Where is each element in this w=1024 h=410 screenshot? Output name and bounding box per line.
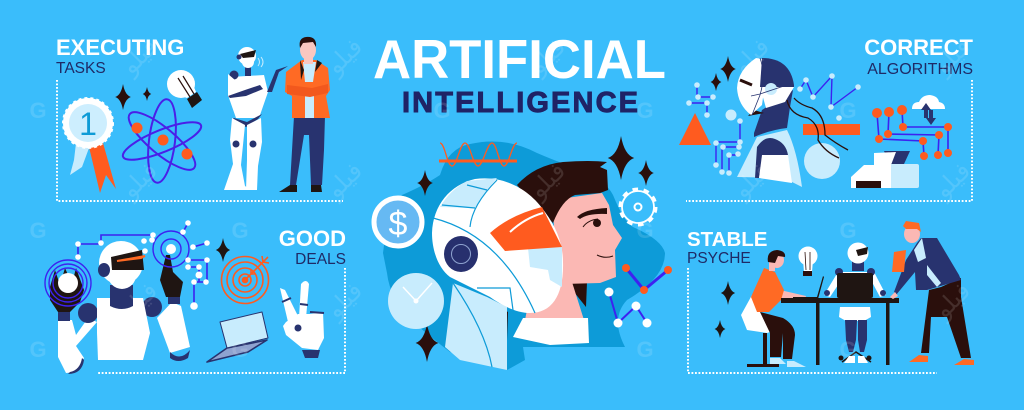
watermarks: فیلو [929,33,976,81]
background blob [383,141,665,370]
watermarks: فیلو [929,277,976,325]
watermarks: G [29,218,47,243]
robot bust [737,58,848,187]
robot at desk [824,242,886,363]
watermarks: فیلو [524,157,571,205]
icon: wave [439,143,517,166]
watermarks: G [29,337,47,362]
heading: correct algorithms: CORRECT [864,35,974,60]
icon: gear [620,189,656,225]
heading: correct algorithms: ALGORITHMS [867,61,973,78]
watermarks: فیلو [728,33,775,81]
panel: center portrait [374,136,672,370]
icon: circles [726,110,840,179]
icon: sparkle [216,238,230,262]
watermarks: G [839,218,857,243]
standing man [890,221,974,365]
icon: light bulb [798,246,818,276]
icon: sparkles [416,136,654,362]
seated man [741,250,806,367]
heading: executing tasks: EXECUTING [56,35,184,60]
icon: dollar coin [374,198,422,246]
watermarks: فیلو [321,157,368,205]
watermarks: G [29,98,47,123]
heading: good deals: GOOD [279,226,346,251]
icon: target [222,256,269,304]
icon: medal: 1 [79,106,97,142]
watermarks: G [636,218,654,243]
icon: sparkles [711,56,736,91]
watermarks: G [839,98,857,123]
watermarks: G [636,337,654,362]
icon: clock [388,273,444,329]
desk and laptop [781,276,899,365]
panel: stable psyche [687,221,974,367]
heading: good deals [279,226,346,268]
icon: medal [63,98,116,193]
icon: printer [851,151,919,188]
robot with rings [50,241,190,374]
watermarks: فیلو [116,157,163,205]
icon: light nodes network [686,73,861,176]
heading: executing tasks [56,35,184,77]
watermarks: فیلو [321,277,368,325]
watermarks: G [636,98,654,123]
icon: graph white [604,288,652,328]
panel: correct algorithms [679,35,974,188]
robot helmet [432,178,563,370]
panel: good deals [45,220,346,374]
watermarks: G [433,98,451,123]
watermarks: G [839,337,857,362]
icon: sparkles [715,281,735,338]
icon: sparkles [115,84,151,110]
icon: light bulb [167,70,202,108]
icon: triangle [679,113,711,145]
heading: executing tasks: TASKS [56,60,106,77]
icon: graph orange [622,264,672,294]
title: ARTIFICIAL [373,28,666,90]
man standing [279,37,330,192]
watermarks: فیلو [321,33,368,81]
face and hair [517,161,622,284]
watermarks: فیلو [929,157,976,205]
title [373,28,666,119]
icon: orange circuit [872,105,952,160]
heading: stable psyche: STABLE [687,228,767,251]
title: INTELLIGENCE [402,87,638,119]
icon: dollar coin: $ [389,205,408,243]
icon: atom [119,98,205,184]
heading: correct algorithms [864,35,974,78]
icon: bar [803,124,860,135]
panel: executing tasks [56,35,330,193]
watermarks: فیلو [116,33,163,81]
watermarks: G [231,337,249,362]
robot standing [224,47,288,190]
neck and collar [488,270,589,345]
watermarks: فیلو [728,157,775,205]
watermarks: G [231,218,249,243]
icon: cloud arrows [912,95,945,125]
watermarks: فیلو [116,277,163,325]
heading: good deals: DEALS [295,251,346,268]
watermarks [29,33,976,362]
heading: stable psyche [687,228,767,267]
icon: laptop [207,312,268,362]
icon: touch rings and network [45,220,210,310]
watermarks: فیلو [524,33,571,81]
icon: peace hand [280,281,324,358]
watermarks: G [433,218,451,243]
heading: stable psyche: PSYCHE [687,250,751,267]
